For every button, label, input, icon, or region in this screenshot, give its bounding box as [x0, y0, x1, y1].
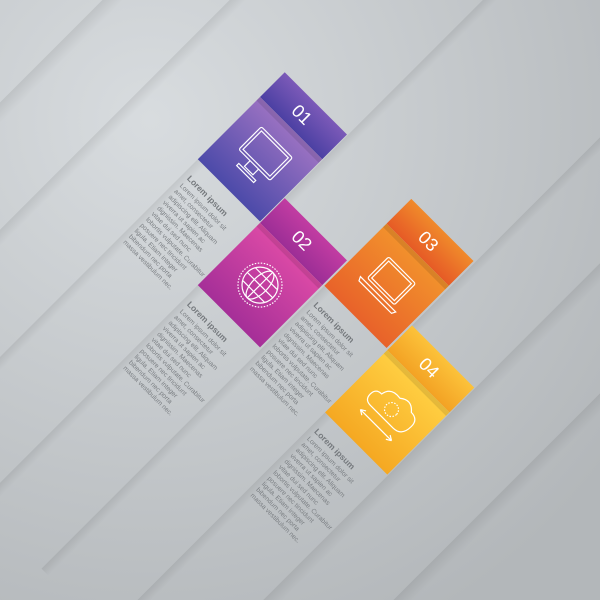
- text 2: lobortis vulputate. Curabitur: [144, 342, 207, 405]
- text 4: adipiscing elit. Aliquam: [294, 447, 346, 499]
- unit 1: [117, 72, 347, 302]
- square 1 with monitor icon: [198, 97, 322, 221]
- square 4 with cloud icon: [325, 350, 450, 475]
- text 4: bibendum nec porta: [254, 487, 301, 533]
- text 1: dignissim. Maecenas: [155, 205, 204, 254]
- unit 3: [244, 199, 474, 429]
- text 4: amet, consectetur: [300, 441, 342, 484]
- text 3: viverra ut sapien ac: [288, 326, 333, 372]
- tab 01: [260, 72, 347, 159]
- square 3 with laptop icon: [324, 224, 449, 348]
- text 1: lobortis vulputate. Curabitur: [144, 217, 207, 279]
- text 2: viverra ut sapien ac: [161, 325, 207, 371]
- text 2: bibendum nec porta: [127, 359, 173, 406]
- text 1: Lorem ipsum: [185, 173, 230, 218]
- text 4: lobortis vulputate. Curabitur: [271, 470, 334, 532]
- text 1: ligula. Etiam integer: [133, 228, 179, 274]
- text 4: dignissim. Maecenas: [283, 458, 332, 507]
- text 1: adipiscing elit. Aliquam: [167, 194, 219, 246]
- text 1: massa vestibulum nec.: [121, 239, 174, 292]
- text 2: amet, consectetur: [172, 314, 215, 357]
- square 2 with globe icon: [198, 223, 322, 347]
- text 2: dignissim. Maecenas: [155, 331, 204, 380]
- text 2: vitae dui sed nunc: [150, 337, 193, 380]
- text 2: adipiscing elit. Aliquam: [167, 320, 219, 372]
- text 4: massa vestibulum nec.: [249, 492, 301, 545]
- tab 01: 01: [288, 101, 316, 129]
- text 2: ligula. Etiam integer: [133, 354, 179, 400]
- text 3: bibendum nec porta: [254, 360, 300, 406]
- text 4: Lorem ipsum dolor sit: [305, 436, 355, 485]
- text 2: posuere nec tincidunt: [138, 348, 188, 397]
- text 1: posuere nec tincidunt: [138, 222, 188, 272]
- text 3: massa vestibulum nec.: [248, 366, 300, 418]
- text 3: Lorem ipsum dolor sit: [305, 309, 354, 359]
- text 3: [248, 300, 376, 428]
- tab 03: 03: [414, 227, 442, 255]
- text 3: Lorem ipsum: [312, 300, 357, 345]
- text 2: massa vestibulum nec.: [121, 365, 174, 417]
- text 3: lobortis vulputate. Curabitur: [271, 343, 333, 406]
- unit 4: [244, 325, 474, 555]
- tab 04: 04: [415, 354, 443, 382]
- text 3: ligula. Etiam integer: [259, 354, 306, 401]
- text 1: vitae dui sed nunc: [150, 211, 193, 254]
- text 4: Lorem ipsum: [312, 427, 357, 472]
- text 2: Lorem ipsum dolor sit: [178, 308, 228, 358]
- text 3: vitae dui sed nunc: [276, 337, 319, 380]
- text 3: dignissim. Maecenas: [282, 332, 331, 381]
- text 1: [121, 173, 250, 302]
- text 2: Lorem ipsum: [185, 299, 230, 344]
- text 1: bibendum nec porta: [127, 233, 173, 280]
- text 4: viverra ut sapien ac: [288, 453, 334, 499]
- tab 02: [260, 198, 347, 285]
- text 3: posuere nec tincidunt: [265, 349, 314, 398]
- text 4: [249, 427, 377, 555]
- unit 2: [117, 198, 347, 428]
- text 4: posuere nec tincidunt: [266, 475, 315, 525]
- tab 02: 02: [288, 226, 316, 255]
- tab 04: [387, 325, 474, 412]
- text 3: amet, consectetur: [299, 315, 341, 357]
- text 1: amet, consectetur: [172, 188, 215, 231]
- text 2: [121, 299, 250, 428]
- text 3: adipiscing elit. Aliquam: [293, 320, 346, 373]
- text 4: vitae dui sed nunc: [277, 464, 320, 507]
- text 1: viverra ut sapien ac: [161, 200, 207, 245]
- text 1: Lorem ipsum dolor sit: [178, 183, 228, 232]
- text 4: ligula. Etiam integer: [260, 481, 306, 527]
- tab 03: [387, 199, 474, 286]
